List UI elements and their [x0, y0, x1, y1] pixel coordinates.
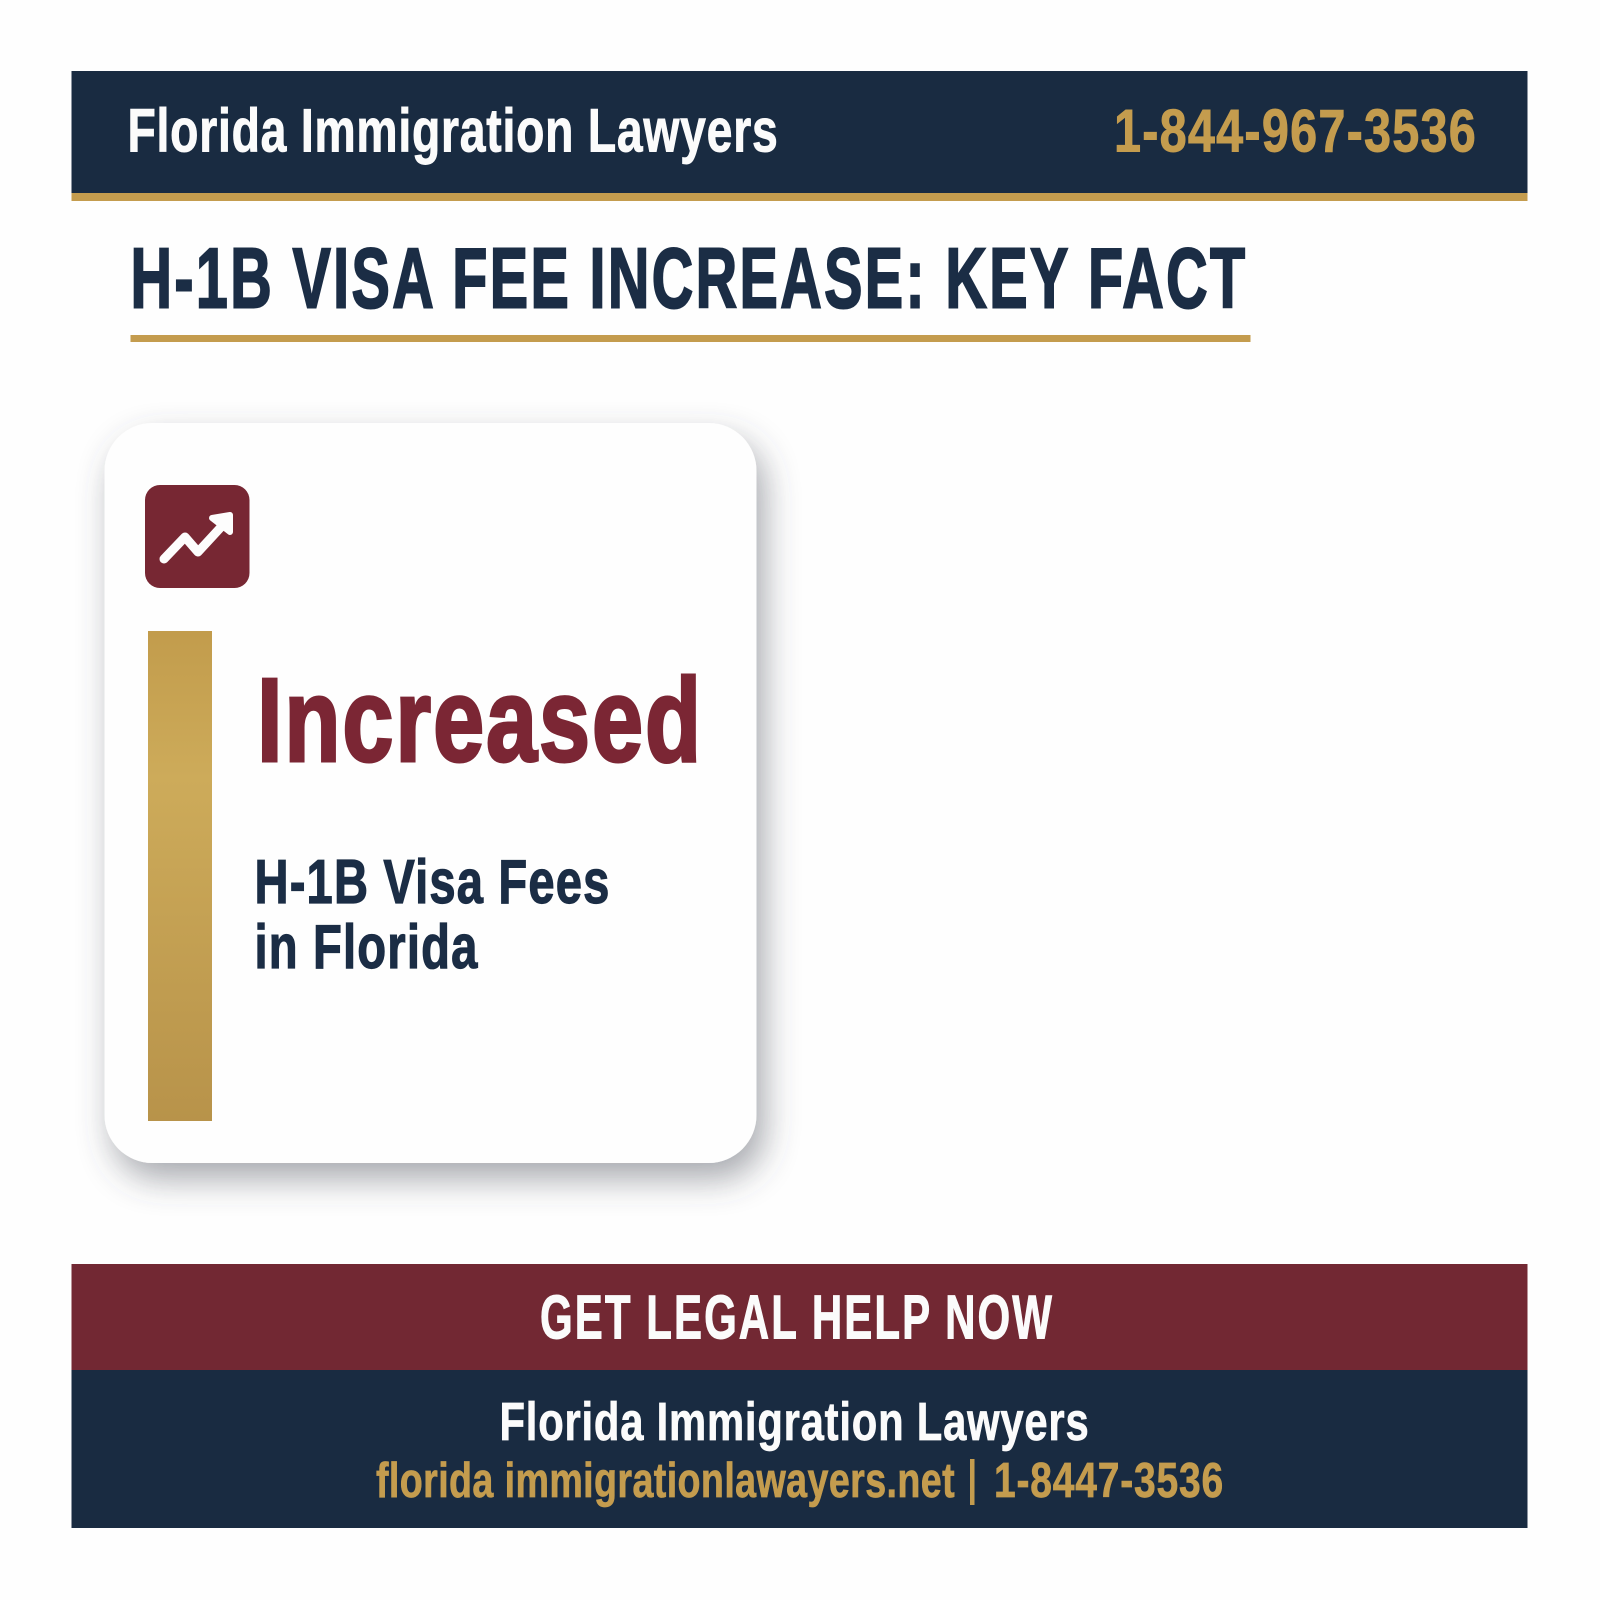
- footer website and phone: florida immigrationlawayers.net: [376, 1454, 955, 1508]
- icon: rising trend arrow: [145, 485, 250, 588]
- footer website and phone: 1-8447-3536: [994, 1454, 1224, 1508]
- footer firm name: Florida Immigration Lawyers: [500, 1392, 1090, 1452]
- description text: [254, 848, 610, 982]
- main title with underline: [130, 232, 1250, 342]
- description text: in Florida: [254, 913, 478, 982]
- headline: Increased: Increased: [257, 654, 703, 787]
- description text: H-1B Visa Fees: [254, 848, 610, 917]
- firm name: Florida Immigration Lawyers: [128, 96, 778, 164]
- top header band: [72, 71, 1528, 201]
- gold accent bar: [148, 631, 212, 1121]
- call to action band: [72, 1264, 1528, 1370]
- phone number: 1-844-967-3536: [1114, 98, 1477, 164]
- footer band: [72, 1370, 1528, 1528]
- call to action band: GET LEGAL HELP NOW: [540, 1284, 1054, 1352]
- panel: key fact card: [104, 423, 756, 1163]
